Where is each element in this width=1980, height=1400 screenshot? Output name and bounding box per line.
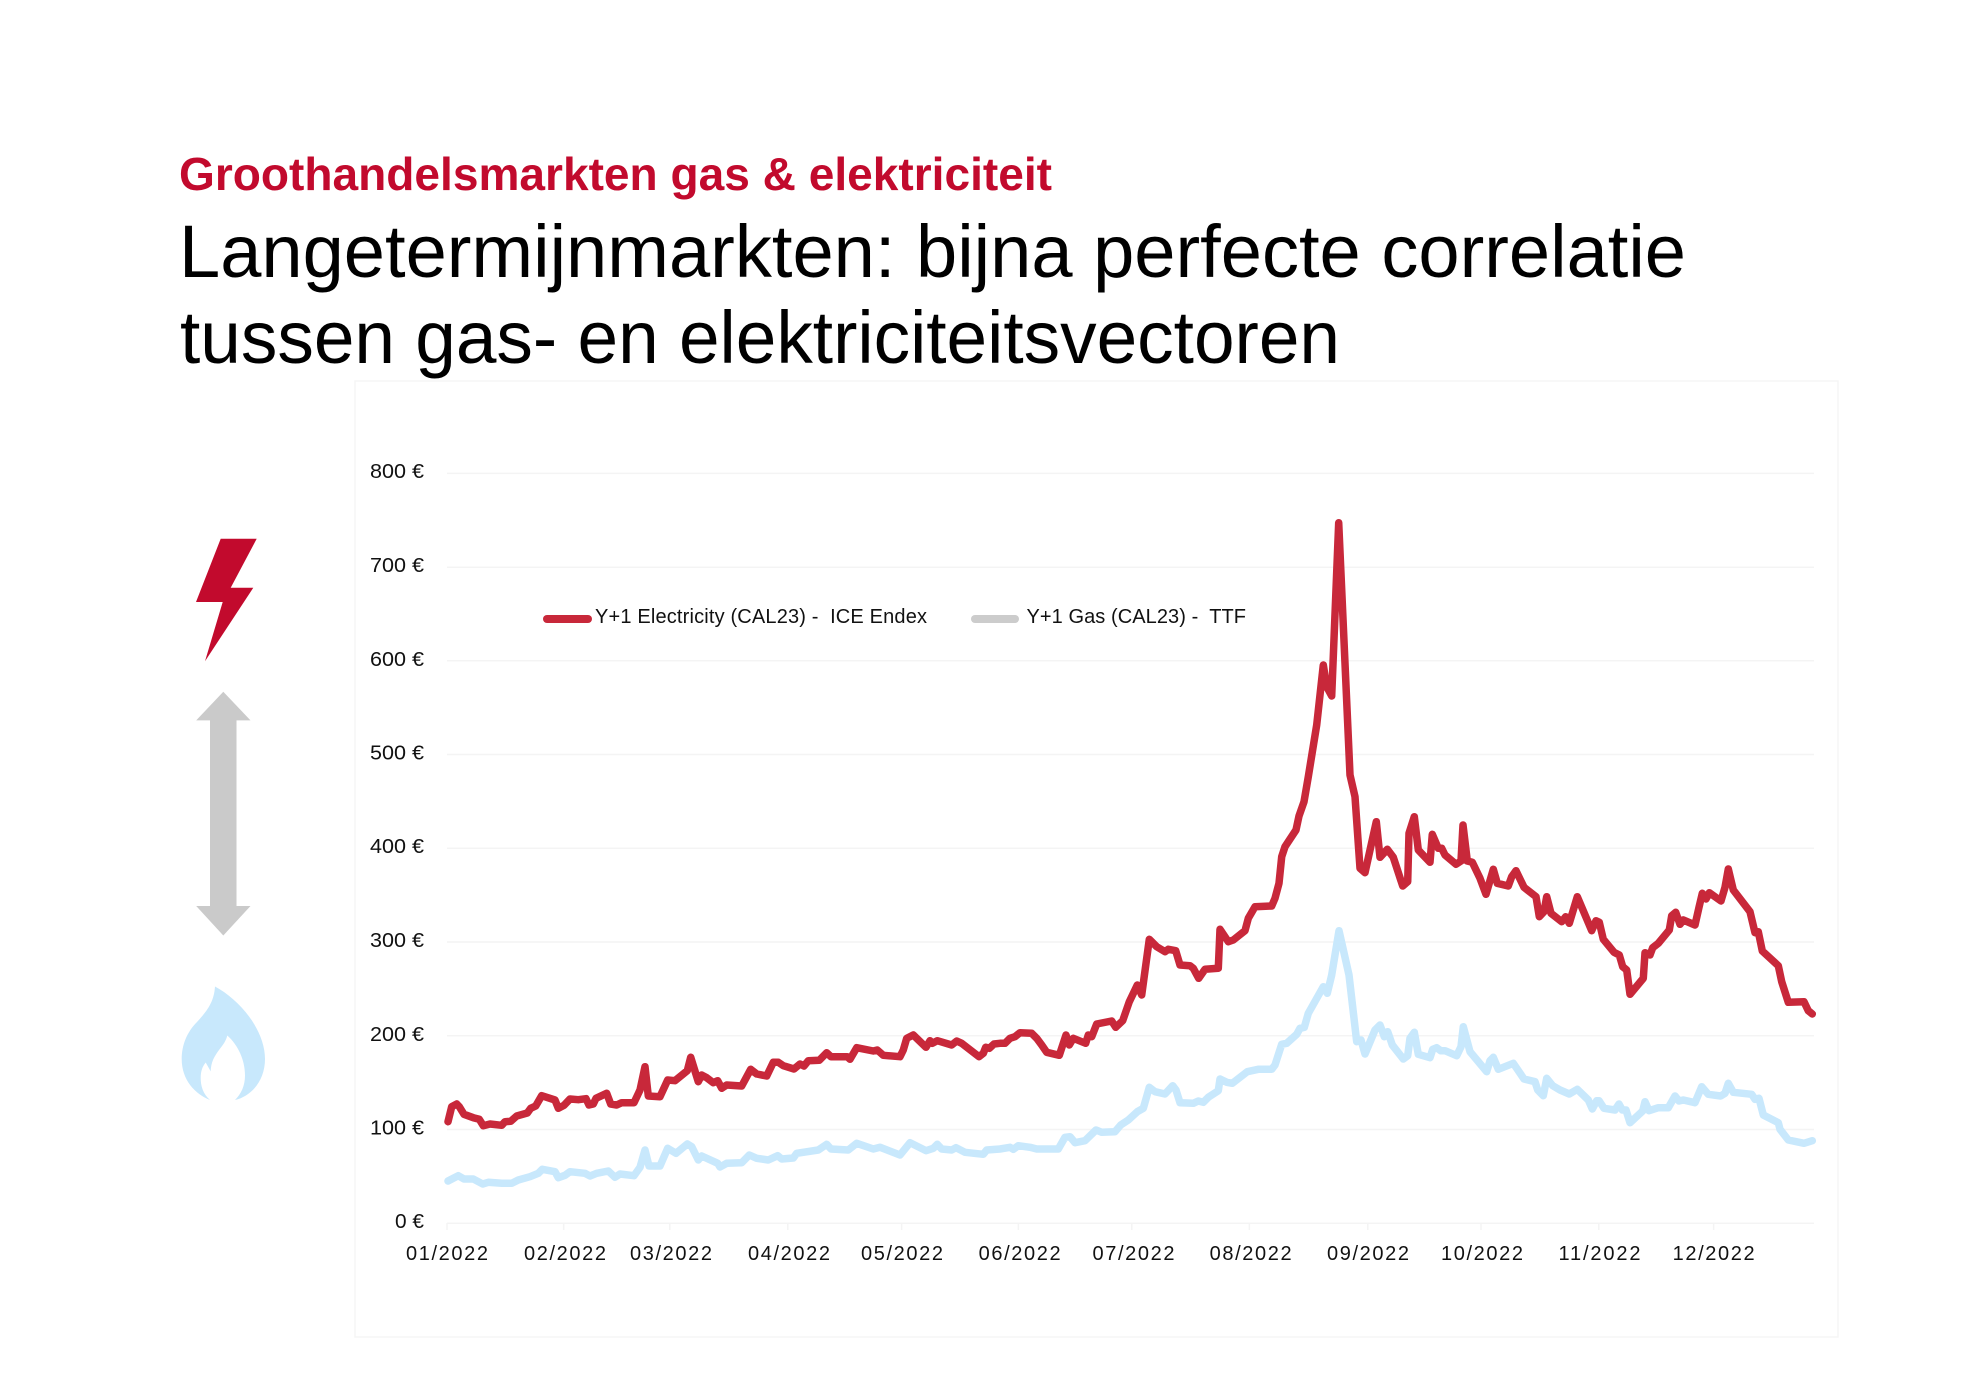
title bbox=[179, 210, 1686, 379]
y-axis labels: 300 € bbox=[370, 930, 424, 952]
x-axis labels bbox=[406, 1243, 1755, 1265]
x-axis labels: 06/2022 bbox=[979, 1243, 1061, 1265]
x-axis labels: 05/2022 bbox=[861, 1243, 943, 1265]
icon: gas flame bbox=[182, 986, 265, 1100]
x-axis labels: 04/2022 bbox=[748, 1243, 830, 1265]
legend: electricity: Y+1 Electricity (CAL23) - ICE Endex bbox=[595, 606, 927, 628]
y-axis labels: 0 € bbox=[395, 1211, 424, 1233]
x-axis labels: 03/2022 bbox=[630, 1243, 712, 1265]
y-axis labels: 200 € bbox=[370, 1024, 424, 1046]
y-axis labels: 700 € bbox=[370, 555, 424, 577]
title: tussen gas- en elektriciteitsvectoren bbox=[180, 296, 1340, 379]
line: Y+1 electricity price bbox=[448, 523, 1812, 1126]
x-axis labels: 01/2022 bbox=[406, 1243, 488, 1265]
y-axis labels: 500 € bbox=[370, 742, 424, 764]
x-axis labels: 08/2022 bbox=[1210, 1243, 1292, 1265]
title: Langetermijnmarkten: bijna perfecte correlatie bbox=[179, 210, 1686, 293]
x-axis labels: 12/2022 bbox=[1673, 1243, 1755, 1265]
y-axis labels bbox=[370, 461, 424, 1233]
x-axis labels: 10/2022 bbox=[1441, 1243, 1523, 1265]
x-axis labels: 11/2022 bbox=[1558, 1243, 1640, 1265]
y-axis labels: 800 € bbox=[370, 461, 424, 483]
x-axis labels: 09/2022 bbox=[1327, 1243, 1409, 1265]
y-axis labels: 100 € bbox=[370, 1118, 424, 1140]
panel: chart background bbox=[355, 381, 1838, 1337]
icon: lightning bolt bbox=[196, 539, 257, 661]
section label: Groothandelsmarkten gas & elektriciteit bbox=[179, 148, 1052, 200]
legend: gas: Y+1 Gas (CAL23) - TTF bbox=[1026, 606, 1246, 628]
y-axis labels: 600 € bbox=[370, 649, 424, 671]
legend bbox=[547, 606, 1246, 628]
icon: double-headed arrow bbox=[196, 692, 250, 936]
line: Y+1 gas price bbox=[448, 931, 1812, 1184]
y-axis labels: 400 € bbox=[370, 836, 424, 858]
x-axis labels: 07/2022 bbox=[1092, 1243, 1174, 1265]
x-axis labels: 02/2022 bbox=[524, 1243, 606, 1265]
